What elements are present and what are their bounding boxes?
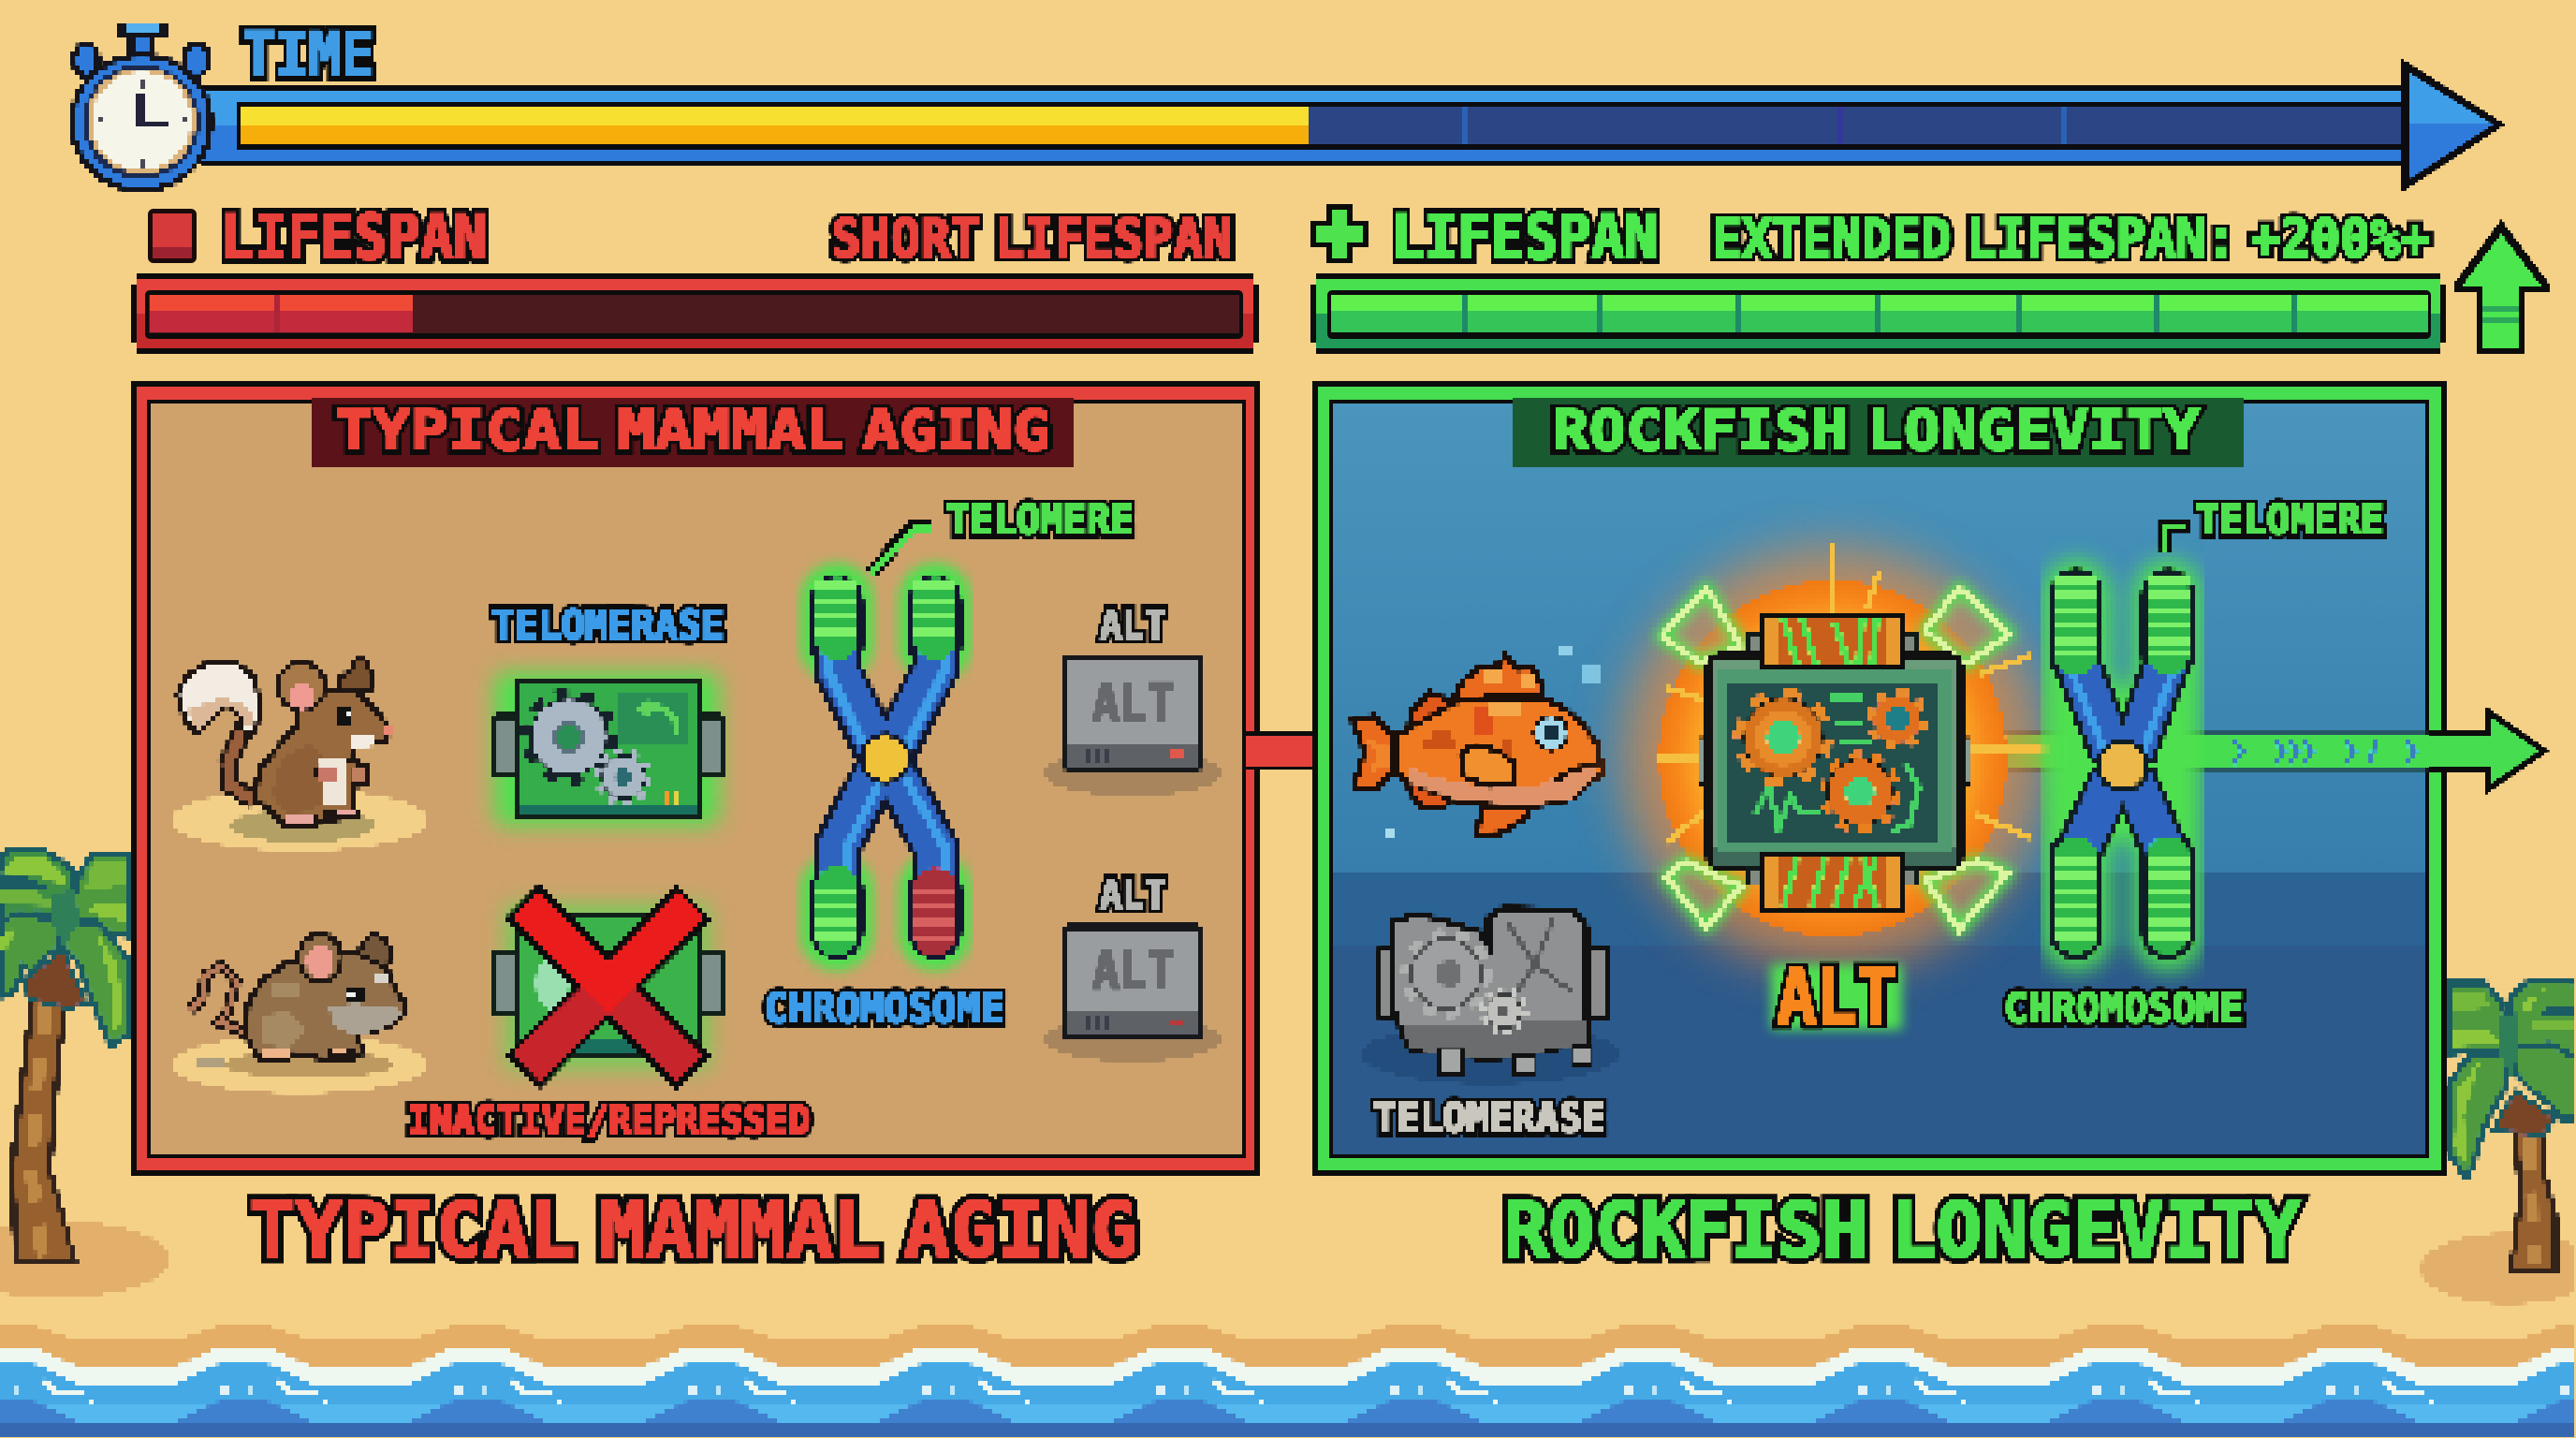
bar frame [1310, 273, 2446, 354]
bar frame [131, 273, 1259, 354]
panel: rockfish longevity [1312, 381, 2447, 1176]
time arrow bar [201, 59, 2505, 192]
label: lifespan minus: LIFESPAN [221, 201, 487, 273]
panel: extended lifespan bar [1310, 204, 2549, 354]
label: telomere: TELOMERE [2196, 496, 2384, 544]
label: short lifespan: SHORT LIFESPAN [831, 209, 1233, 270]
ALT block bottom [1044, 924, 1222, 1062]
arrow: output to longevity [2429, 707, 2549, 794]
medium orange gear [1824, 756, 1895, 828]
label: chromosome: CHROMOSOME [764, 985, 1004, 1033]
icon: stopwatch [69, 22, 213, 193]
ALT block text bottom: ALT [1092, 941, 1174, 1002]
label: ALT top: ALT [1100, 602, 1166, 650]
chromosome with shortened telomere [827, 582, 944, 947]
rockfish [1353, 655, 1603, 835]
remaining time track [1309, 107, 2402, 144]
arrow head [2402, 59, 2505, 192]
label: inactive: INACTIVE/REPRESSED [407, 1097, 811, 1143]
coils bottom [1746, 854, 1921, 911]
old mammal [171, 934, 428, 1093]
label: ALT bottom: ALT [1100, 872, 1166, 919]
arrow: extended output [2004, 731, 2427, 772]
green energy triangles [1661, 588, 2010, 930]
label: telomerase: TELOMERASE [491, 602, 724, 650]
orange energy burst [1622, 543, 2050, 969]
top labels [221, 19, 2430, 273]
icon: active telomerase machine [491, 672, 724, 826]
young mammal [171, 660, 428, 851]
bar fill full [1331, 295, 2428, 332]
beach scenery [0, 849, 2576, 1438]
connector between panels [1246, 731, 1312, 770]
label: telomere: TELOMERE [946, 496, 1134, 544]
label: lifespan plus: LIFESPAN [1391, 201, 1658, 273]
icon: plus [1310, 204, 1368, 263]
label: telomerase inactive: TELOMERASE [1373, 1094, 1605, 1142]
bar fill short [150, 295, 413, 332]
icon: plus fill [1316, 210, 1363, 258]
icon: minus block [148, 209, 197, 263]
ALT mechanism [1622, 543, 2050, 969]
ocean waves [0, 1311, 2576, 1438]
elapsed time fill [241, 107, 1309, 144]
telomere pointer fill [2166, 527, 2187, 552]
heading banner: TYPICAL MAMMAL AGING [335, 398, 1050, 462]
broken telomerase machine [1361, 908, 1619, 1084]
arrow: up [2454, 220, 2549, 354]
machine body [1697, 653, 1972, 871]
panel: short lifespan bar [131, 209, 1259, 354]
panel labels [1373, 496, 2384, 1142]
label: chromosome: CHROMOSOME [2004, 985, 2244, 1033]
bottom headings [249, 1187, 2301, 1275]
palm tree left [0, 849, 170, 1298]
icon: repressed telomerase machine [491, 904, 724, 1069]
ALT block top [1044, 654, 1222, 796]
bar track [149, 295, 1239, 333]
bubbles [1387, 644, 1601, 836]
big ALT label: ALT [1777, 954, 1896, 1042]
label: extended lifespan: EXTENDED LIFESPAN: +200%+ [1712, 209, 2430, 270]
ALT block text top: ALT [1092, 673, 1174, 734]
heading banner: ROCKFISH LONGEVITY [1552, 398, 2201, 462]
small orange gear [1871, 693, 1924, 745]
ocean background [1333, 404, 2425, 1154]
coils top [1746, 613, 1921, 669]
panel: typical mammal aging [131, 381, 1260, 1176]
panel labels [407, 496, 1174, 1143]
heading: typical mammal aging: TYPICAL MAMMAL AGING [249, 1187, 1137, 1275]
heading: rockfish longevity: ROCKFISH LONGEVITY [1503, 1187, 2301, 1275]
telomere pointer fill [871, 528, 933, 573]
palm tree right [2421, 981, 2576, 1304]
display traces [1755, 697, 1919, 831]
large orange gear [1742, 697, 1824, 779]
telomere pointer [2166, 525, 2188, 554]
chromosome with long telomeres [2067, 577, 2177, 947]
telomere pointer [871, 524, 933, 573]
label: time: TIME [242, 19, 374, 91]
